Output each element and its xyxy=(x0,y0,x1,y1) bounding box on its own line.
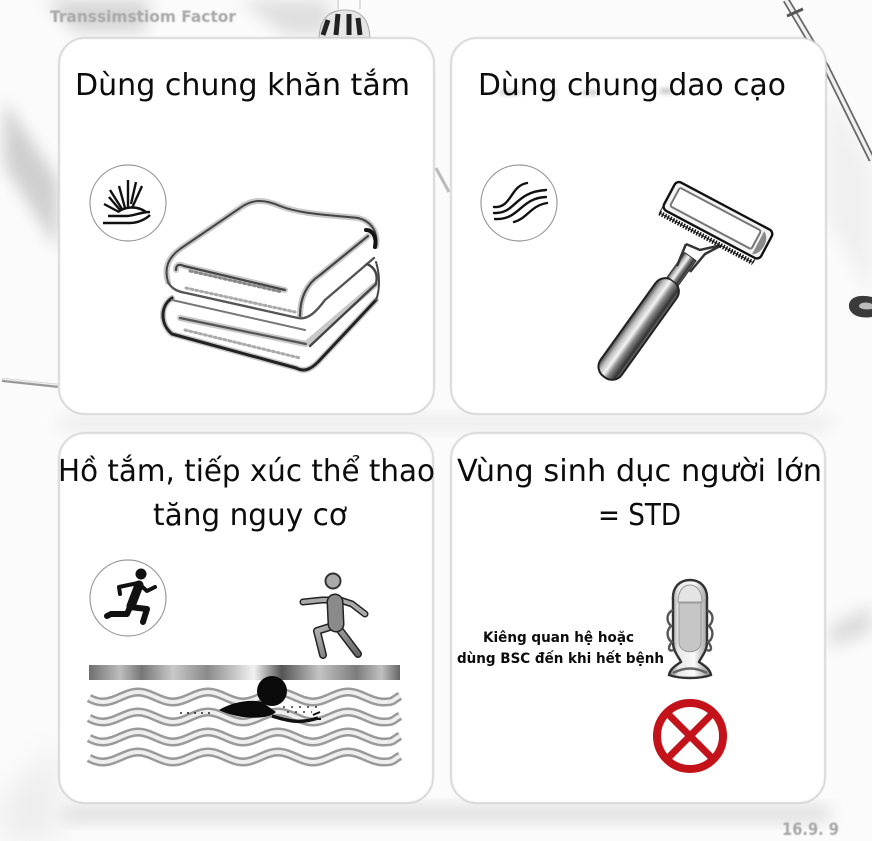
panel: shared razor xyxy=(451,38,826,414)
icon: runner xyxy=(90,560,166,636)
panel: adult genital area STD xyxy=(451,433,832,803)
icon: walking figure xyxy=(303,574,365,655)
chart: pool rail xyxy=(89,665,400,680)
header text: Transsimstiom Factor xyxy=(50,7,236,26)
decorative metal rod left xyxy=(2,168,449,386)
decorative metal rod top right xyxy=(786,0,872,160)
decorative knob top xyxy=(319,0,370,38)
icon: prohibited sign xyxy=(657,703,723,769)
illustration: razor xyxy=(594,180,774,385)
razor neck xyxy=(677,244,722,272)
heading: adult genital area STD: = STD xyxy=(598,498,681,533)
heading: pool and contact sports: tăng nguy cơ xyxy=(153,498,347,533)
heading: shared towel: Dùng chung khăn tắm xyxy=(75,68,410,103)
panel: pool and contact sports xyxy=(58,433,445,803)
ghost text smudges xyxy=(500,88,672,96)
illustration: waves xyxy=(89,692,400,762)
razor head xyxy=(660,180,774,265)
icon: folded towels xyxy=(163,201,379,370)
panel: shared towel xyxy=(59,38,434,414)
note: abstain or use condom: dùng BSC đến khi hết bệnh xyxy=(457,650,664,667)
razor handle xyxy=(594,249,701,385)
note: abstain or use condom: Kiêng quan hệ hoặc xyxy=(483,630,634,646)
illustration: swimmer xyxy=(180,676,321,721)
heading: pool and contact sports: Hồ tắm, tiếp xúc thể thao xyxy=(58,453,435,489)
icon: condom xyxy=(668,580,712,678)
decorative metal knob right xyxy=(849,296,872,317)
icon: skin irritation xyxy=(90,165,166,241)
date stamp: 16.9. 9 xyxy=(782,820,839,840)
icon: hair waves xyxy=(481,165,557,241)
heading: adult genital area STD: Vùng sinh dục người lớn xyxy=(457,454,822,489)
heading: shared razor: Dùng chung dao cạo xyxy=(478,68,786,103)
